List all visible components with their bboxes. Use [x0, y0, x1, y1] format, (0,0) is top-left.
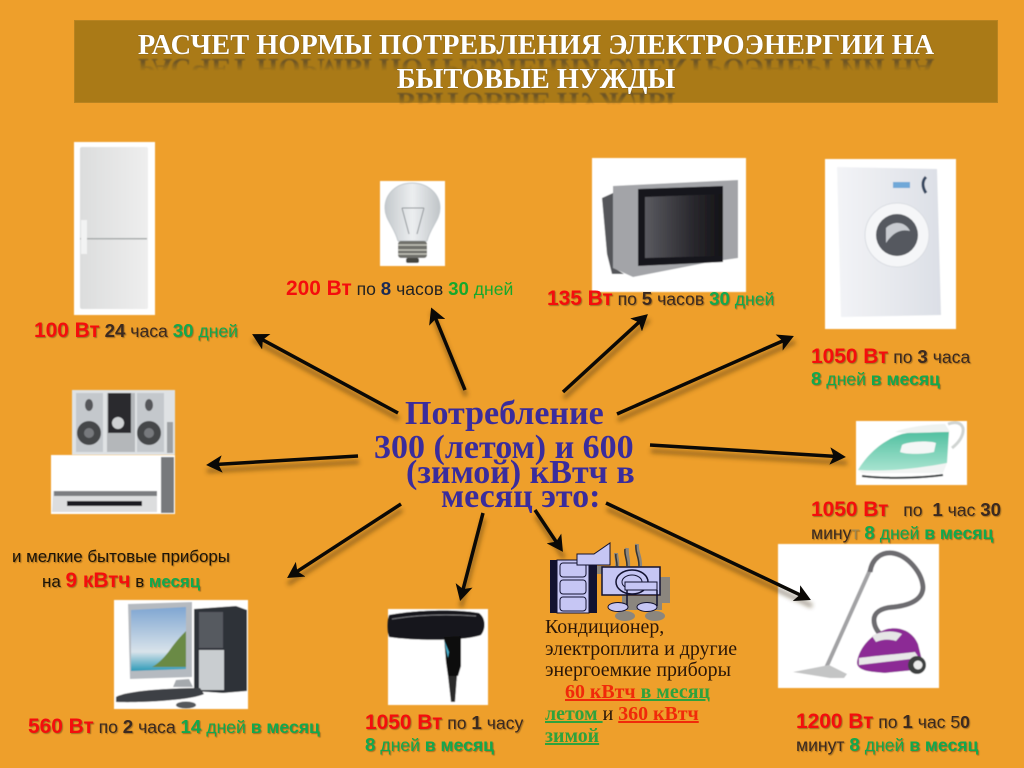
label: washing machine: 1050 Вт по 3 часа [811, 345, 970, 368]
label: vacuum cleaner: 1200 Вт по 1 час 50 [796, 710, 970, 733]
label: air conditioner and other appliances: электроплита и другие [545, 638, 737, 660]
icon: vacuum cleaner [778, 544, 939, 688]
arrows radiating from the centre [207, 312, 847, 607]
arrow: to small appliances [291, 504, 401, 575]
label: washing machine: 8 дней в месяц [811, 368, 940, 389]
arrow: to washing machine [617, 338, 789, 414]
label: air conditioner and other appliances: зимой [545, 725, 599, 747]
label: vacuum cleaner: минут 8 дней в месяц [796, 734, 978, 754]
arrow: to iron [650, 445, 841, 457]
title text: БЫТОВЫЕ НУЖДЫ [397, 86, 675, 117]
label: hair dryer: 8 дней в месяц [365, 734, 494, 755]
icon: multimedia clip-art [550, 543, 670, 621]
title text: БЫТОВЫЕ НУЖДЫ [397, 64, 675, 95]
label: air conditioner and other appliances [545, 616, 737, 747]
central text: (зимой) кВтч в [406, 454, 635, 491]
label: computer: 560 Вт по 2 часа 14 дней в месяц [28, 715, 320, 738]
icon: hair dryer [388, 609, 488, 705]
icon: stereo system [72, 390, 175, 455]
label: television: 135 Вт по 5 часов 30 дней [547, 287, 774, 310]
arrow: to stereo [211, 456, 358, 465]
title text: РАСЧЕТ НОРМЫ ПОТРЕБЛЕНИЯ ЭЛЕКТРОЭНЕРГИИ НА [138, 30, 934, 61]
label: air conditioner and other appliances: 60 кВтч в месяц [565, 681, 710, 703]
label: hair dryer [365, 711, 524, 756]
label: small appliances [12, 547, 230, 592]
label: hair dryer: 1050 Вт по 1 часу [365, 711, 523, 734]
title text: РАСЧЕТ НОРМЫ ПОТРЕБЛЕНИЯ ЭЛЕКТРОЭНЕРГИИ НА [138, 52, 934, 83]
label: washing machine [811, 345, 972, 390]
icon: iron [856, 421, 967, 485]
central text: месяц это: [441, 478, 601, 515]
label: small appliances: на 9 кВтч в месяц [42, 569, 200, 592]
central text [374, 395, 635, 515]
label: light bulb: 200 Вт по 8 часов 30 дней [286, 277, 513, 300]
label: air conditioner and other appliances: летом и 360 кВтч [545, 703, 699, 725]
icon: light bulb [380, 181, 445, 266]
icon: washing machine [825, 159, 956, 329]
label: air conditioner and other appliances: Кондиционер, [545, 616, 664, 638]
arrow: to television [563, 317, 644, 392]
title text [138, 30, 934, 104]
central text: 300 (летом) и 600 [374, 429, 634, 466]
arrow: to hair dryer [461, 513, 483, 596]
label: vacuum cleaner [796, 710, 980, 756]
label: iron [811, 498, 1002, 544]
icon: television [592, 158, 746, 292]
icon: refrigerator [74, 142, 155, 315]
label: air conditioner and other appliances: энергоемкие приборы [545, 659, 731, 681]
central text: Потребление [405, 395, 604, 432]
label: iron: 1050 Вт по 1 час 30 [811, 498, 1001, 521]
arrow: to vacuum cleaner [606, 503, 806, 598]
label: small appliances: и мелкие бытовые приборы [12, 547, 230, 566]
arrow: to air conditioner group [535, 510, 560, 548]
icon: DVD player [51, 455, 175, 514]
arrow: to refrigerator [256, 336, 398, 413]
icon: computer [114, 600, 248, 709]
arrow: to light bulb [433, 312, 465, 390]
title banner [74, 20, 998, 103]
label: refrigerator: 100 Вт 24 часа 30 дней [34, 319, 238, 342]
label: iron: минут 8 дней в месяц [811, 522, 993, 542]
